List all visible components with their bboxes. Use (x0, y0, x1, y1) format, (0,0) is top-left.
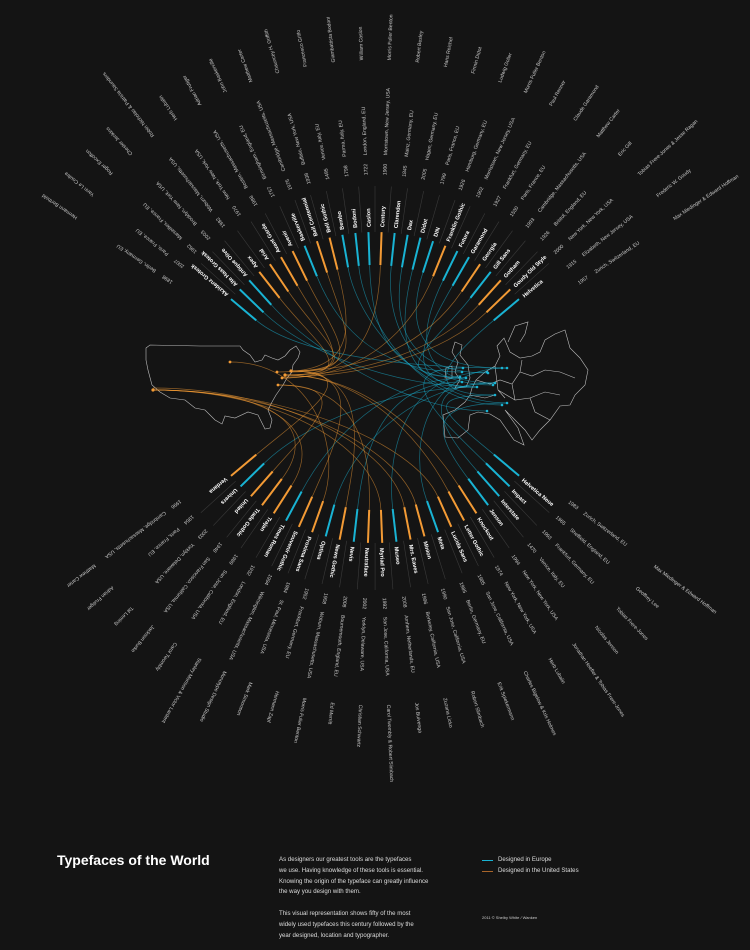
typeface: Arial: Robin Nicholas & Patricia Saunders (101, 70, 156, 138)
typeface: Minion: San Jose, California, USA (444, 606, 467, 665)
typeface: News Gothic: Woburn, Massachusetts, USA (305, 611, 325, 679)
typeface: Antique Olive: Roger Excoffon (85, 148, 114, 176)
typeface: Clarendon: 1845 (402, 165, 409, 177)
typeface: Arial: Woburn, Massachusetts, USA (168, 155, 215, 213)
typeface: Helvetica: Helvetica (522, 278, 545, 299)
typeface: Bell Gothic: Bell Gothic (320, 203, 333, 233)
connection curves (153, 265, 507, 510)
typeface: Impact: Impact (510, 489, 527, 506)
typeface: Myriad Pro: Myriad Pro (378, 548, 385, 578)
typeface: Trajan: Trajan (258, 515, 272, 533)
typeface: Avenir: 1988 (249, 194, 259, 207)
typeface: Clarendon: Robert Besley (415, 30, 425, 63)
typeface: Dax: Hagen, Germany, EU (425, 112, 440, 161)
typeface: Souvenir Gothic: Wilmington, Massachusetts, USA (227, 590, 265, 661)
typeface: Bell Gothic: Buffalo, New York, USA (287, 112, 307, 165)
typeface: Baskerville: Baskerville (290, 212, 307, 242)
typeface: Century: Morristown, New Jersey, USA (383, 87, 392, 155)
typeface: Avenir: Avenir (281, 228, 294, 247)
typeface: Souvenir Gothic: 1994 (263, 573, 273, 586)
typeface: Jenson: 1470 (525, 542, 537, 555)
typeface: Bembo: 1495 (323, 168, 331, 180)
typeface: Avenir: Boston, Massachusetts, USA (212, 128, 250, 189)
typeface: Optima: 1952 (301, 587, 310, 600)
legend: Designed in Europe (498, 856, 552, 863)
typeface: Neutraface: Neutraface (362, 548, 369, 577)
typeface: Goudy Old Style: 1915 (565, 259, 578, 271)
description text: widely used typefaces this century followed by the (279, 921, 414, 928)
typeface: Proxima Sans (235, 500, 332, 716)
typeface: Jenson: Venice, Italy, EU (537, 557, 566, 589)
typeface: Goudy Old Style (485, 168, 693, 318)
typeface: DIN: Ludwig Goller (497, 52, 514, 84)
description text: the way you design with them. (279, 888, 361, 895)
typeface: News Gothic (292, 506, 355, 743)
typeface: Letter Gothic: Herb Lubalin (547, 657, 566, 685)
typeface: Dax: Hans Reichel (443, 37, 455, 68)
typeface: Futura: 1927 (492, 195, 503, 208)
typeface: Gill Sans: Eric Gill (617, 141, 633, 158)
typeface: Caslon: Caslon (366, 208, 373, 227)
typeface: Proxima Sans: Mark Simonson (235, 681, 253, 716)
typeface: United: United (232, 497, 249, 514)
typeface: Lucida Sans: San Jose, California, USA (484, 591, 515, 647)
typeface: Lucida Sans: Lucida Sans (449, 531, 468, 563)
typeface: Georgia: 1993 (525, 217, 536, 230)
typeface: United: Yorklyn, Delaware, USA (153, 541, 195, 585)
typeface: Baskerville (208, 57, 325, 277)
typeface: Interstate (474, 465, 649, 642)
typeface: Univers (85, 460, 270, 611)
typeface: Futura (442, 79, 567, 284)
typeface: Impact: Sheffield, England, EU (568, 527, 611, 566)
typeface: Myriad Pro: 1992 (381, 598, 387, 609)
typeface: United (113, 468, 279, 627)
typeface: Baskerville: 1757 (266, 185, 277, 198)
typeface: Letter Gothic: Letter Gothic (463, 524, 484, 558)
typeface: Optima (265, 503, 343, 724)
typeface: Nevis: Ed Merritt (326, 702, 335, 725)
typeface: Nevis (326, 508, 366, 725)
typeface: Franklin Gothic: Morris Fuller Benton (523, 50, 548, 94)
typeface: Dax (400, 37, 455, 269)
typeface: Univers: Univers (219, 487, 238, 505)
typeface: Akzidenz Grotesk: Akzidenz Grotesk (190, 262, 230, 297)
typeface: Akzidenz Grotesk (41, 192, 262, 322)
description text: year designed, location and typographer. (279, 932, 389, 939)
typeface: Interstate: Frankfurt, Germany, EU (553, 543, 595, 586)
typeface: Interstate: 1993 (540, 529, 553, 541)
typeface: Gotham: Gotham (503, 260, 522, 280)
typeface: Helvetica Neue: 1983 (567, 500, 579, 511)
typeface: Garamond: Garamond (470, 227, 490, 255)
typeface: Apex: Brooklyn, New York, USA (155, 179, 199, 226)
typeface: Nevis: Bournemouth, England, EU (332, 615, 346, 677)
typeface: Univers: 1954 (182, 513, 195, 525)
typeface: United: Tal Leming (113, 605, 134, 627)
typeface: Franklin Gothic: Morristown, New Jersey, USA (483, 117, 517, 181)
typeface: Interstate: Tobias Frere-Jones (614, 606, 649, 642)
typeface: Interstate: Interstate (499, 499, 520, 522)
typeface: Garamond: 1530 (509, 205, 520, 218)
typeface: Helvetica Neue: Max Miedinger & Edward Hoffman (652, 564, 718, 616)
typeface: Bodoni: Bodoni (351, 208, 359, 228)
typeface: Bell Centennial: Bell Centennial (301, 196, 320, 237)
typeface: Lucida Sans (434, 493, 557, 737)
typeface: Georgia (460, 108, 622, 296)
typeface: Museo: Jos Buivenga (413, 702, 423, 733)
typeface: Bell Centennial: Cambridge, Massachusetts, USA (256, 99, 287, 172)
typeface: Arial: Arial (259, 247, 271, 261)
typeface: News Gothic: News Gothic (328, 544, 340, 578)
map: united states (146, 345, 300, 429)
typeface: Gotham: Tobias Frere-Jones & Jesse Ragan (637, 119, 699, 177)
typeface: Futura: Futura (458, 229, 472, 249)
typeface: Myriad Pro (376, 510, 394, 782)
typeface: Souvenir Gothic: Souvenir Gothic (275, 530, 298, 572)
typeface: Gotham: New York, New York, USA (567, 197, 615, 242)
typeface: Georgia: Matthew Carter (596, 108, 622, 139)
typeface: Caslon: London, England, EU (361, 106, 369, 155)
typeface: Meta (423, 498, 515, 721)
typeface: Clarendon (390, 30, 425, 267)
typeface: Apex: Apex (246, 254, 260, 269)
typeface: Franklin Gothic: Franklin Gothic (446, 202, 467, 243)
typeface: Antique Olive: Marseilles, France, EU (142, 201, 184, 241)
typeface: Knockout (455, 481, 626, 719)
typeface: Souvenir Gothic: Monotype Design Studio (198, 670, 227, 723)
typeface: Franklin Gothic (432, 50, 548, 279)
typeface: Lucida Sans: 1985 (476, 574, 486, 587)
typeface: Antique Olive: 1962 (186, 242, 199, 254)
typeface: Didot: Firmin Didot (470, 46, 484, 75)
typeface: Verdana (65, 451, 262, 588)
typeface: Meta: 1985 (458, 581, 467, 594)
typeface: Museo: Arnhem, Netherlands, EU (403, 615, 415, 674)
typeface: Alte Haas Grotesk: Alte Haas Grotesk (200, 249, 239, 287)
typeface: Trade Gothic: Trade Gothic (235, 507, 260, 537)
typeface: Clarendon: Mainz, Germany, EU (404, 110, 415, 157)
typeface: Antique Olive (85, 148, 277, 306)
description text: we use. Having knowledge of these tools is essential. (279, 867, 423, 874)
typeface: Alte Haas Grotesk: Yann Le Coultre (63, 170, 96, 197)
typeface: Bell Centennial: 1975 (285, 178, 294, 191)
typeface: Trajan (154, 483, 299, 672)
typeface: Jenson: Nicolas Jenson (593, 625, 620, 656)
typeface: Alte Haas Grotesk: 2007 (173, 257, 186, 269)
typeface: DIN: Hamburg, Germany, EU (465, 119, 489, 173)
typeface: Knockout: Jonathan Hoefler & Tobias Frere-Jones (570, 642, 626, 719)
typeface: Mrs. Eaves: Zuzana Licko (441, 697, 453, 728)
typeface: Helvetica Neue: Helvetica Neue (520, 478, 554, 508)
credit: 2011 © Shelby White / Wanken (482, 915, 537, 920)
typeface: Baskerville: John Baskerville (208, 57, 229, 94)
typeface: Optima: Optima (315, 540, 326, 561)
typeface: Neutraface: Christian Schwartz (355, 705, 363, 748)
typeface: Letter Gothic: New York, New York, USA (503, 581, 538, 636)
typeface: Times Roman: London, England, EU (217, 580, 246, 625)
typeface: Apex: 2003 (200, 228, 212, 241)
typeface: Mrs. Eaves (400, 506, 453, 728)
typeface: Myriad Pro: Carol Twombly & Robert Slimbach (385, 705, 394, 782)
typeface: Avant Garde (158, 94, 305, 287)
typeface: Century: Morris Fuller Benton (387, 14, 395, 60)
typeface: Helvetica: Max Miedinger & Edward Hoffman (672, 174, 740, 222)
typeface: Bell Gothic: 1938 (304, 172, 313, 185)
map: europe (443, 322, 588, 445)
typeface: Times Roman: Stanley Morison & Victor Lardent (160, 656, 202, 724)
typeface: Univers: Adrian Frutiger (85, 584, 115, 611)
typeface: Times Roman (160, 489, 309, 724)
typeface: Bodoni: 1798 (343, 165, 350, 177)
typeface: DIN: 1926 (458, 179, 467, 191)
typeface: Bell Centennial (237, 48, 335, 273)
typeface: Gotham: 2000 (553, 244, 565, 256)
typeface: Knockout: 1994 (510, 554, 521, 567)
typeface: Minion: Minion (421, 541, 432, 560)
typeface: Bodoni: Parma, Italy, EU (338, 120, 348, 157)
typeface: Letter Gothic: 1974 (493, 564, 504, 577)
typeface: Bell Centennial: Matthew Carter (237, 48, 254, 83)
typeface: Neutraface: 2002 (361, 598, 367, 609)
typeface: Mrs. Eaves: Berkeley, California, USA (424, 611, 441, 669)
typeface: Akzidenz Grotesk: Berlin, Germany, EU (116, 242, 158, 273)
typeface: United: 2003 (196, 528, 208, 540)
description text: Knowing the origin of the typeface can greatly influence (279, 878, 428, 885)
typeface: Mrs. Eaves: 1996 (420, 593, 428, 605)
typeface: Impact (483, 457, 660, 610)
typeface: Caslon (358, 26, 378, 265)
typeface: Lucida Sans: Charles Bigelow & Kris Holmes (522, 670, 557, 737)
typeface: Avant Garde: 1970 (231, 204, 243, 217)
typeface: Didot (411, 46, 484, 272)
typeface: Avenir (182, 74, 314, 281)
top arc: typefaces A-H (41, 14, 740, 324)
typeface: Trajan: San Jose, California, USA (189, 568, 228, 621)
typeface: Bembo (296, 29, 356, 268)
typeface: Didot: Didot (420, 218, 430, 234)
typeface: Didot: 1799 (439, 173, 448, 185)
typeface: Proxima Sans: Proxima Sans (294, 535, 312, 572)
typeface: Minion (411, 502, 485, 729)
typeface: Helvetica (493, 174, 740, 324)
typeface: Futura: Paul Renner (548, 79, 567, 107)
typeface: Alte Haas Grotesk (63, 170, 269, 313)
typeface: Goudy Old Style: Goudy Old Style (513, 255, 548, 289)
typeface: DIN: DIN (433, 227, 442, 238)
typeface: Bembo: Venice, Italy, EU (314, 123, 327, 160)
typeface: Gill Sans: 1926 (539, 230, 552, 242)
typeface: Meta: Berlin, Germany, EU (464, 599, 486, 645)
typeface: Avant Garde: Avant Garde (261, 222, 282, 254)
typeface: Antique Olive: Antique Olive (221, 247, 249, 278)
typeface: Optima: Hermann Zapf (265, 690, 280, 724)
typeface: Garamond (451, 84, 601, 290)
typeface: Century: Century (380, 205, 387, 227)
typeface: Museo (388, 508, 423, 733)
typeface: Akzidenz Grotesk: Hermann Berthold (41, 192, 79, 220)
typeface: Georgia: Cambridge, Massachusetts, USA (537, 151, 588, 214)
typeface: Museo: Museo (393, 547, 401, 565)
typeface: Bodoni (326, 16, 367, 266)
description text: As designers our greatest tools are the typefaces (279, 856, 411, 863)
typeface: Knockout: Knockout (475, 517, 494, 542)
typeface: Times Roman: 1932 (245, 564, 256, 577)
typeface: Proxima Sans: 1994 (281, 581, 291, 594)
typeface: Meta: Erik Spiekermann (496, 681, 515, 721)
typeface: Arial: 1982 (215, 216, 227, 228)
typeface: Verdana: Cambridge, Massachusetts, USA (103, 509, 167, 560)
typeface: Jenson: Jenson (488, 508, 504, 528)
typeface: Univers: Paris, France, EU (146, 526, 180, 557)
typeface: Impact: 1965 (554, 515, 567, 527)
typeface: Trade Gothic: Jackson Burke (129, 624, 155, 654)
typeface: DIN (421, 52, 514, 275)
typeface: Jenson (465, 473, 620, 656)
typeface: Alte Haas Grotesk: Paris, France, EU (135, 227, 170, 257)
bottom arc: typefaces H-V (65, 451, 718, 782)
typeface: Helvetica Neue (491, 453, 718, 616)
typeface: Apex (105, 125, 286, 299)
typeface: Trade Gothic (129, 476, 289, 654)
typeface: Optima: Frankfurt, Germany, EU (284, 606, 304, 659)
typeface: News Gothic: Morris Fuller Benton (292, 697, 307, 743)
typeface: Futura: Frankfurt, Germany, EU (502, 140, 534, 190)
typeface: Century (379, 14, 395, 265)
location dots (151, 361, 508, 412)
typeface: Mrs. Eaves: Mrs. Eaves (407, 544, 418, 574)
typeface: Goudy Old Style: Frederic W. Goudy (655, 168, 693, 199)
typeface: Trajan: 1989 (227, 553, 239, 566)
typeface: Bell Gothic: Chauncey H. Griffith (263, 28, 281, 74)
typeface: Trade Gothic: San Francisco, California, USA (162, 556, 211, 614)
typeface: Minion: Robert Slimbach (469, 691, 485, 729)
typeface: Bell Gothic (263, 28, 345, 270)
typeface: Didot: Paris, France, EU (445, 125, 462, 166)
title: Typefaces of the World (57, 852, 210, 868)
typeface: Meta: Meta (436, 536, 446, 551)
typeface: Bodoni: Giambattista Bodoni (326, 16, 337, 63)
typeface: Goudy Old Style: Elizabeth, New Jersey, USA (581, 214, 635, 258)
typeface: Nevis: 2008 (340, 596, 348, 608)
description text: This visual representation shows fifty of the most (279, 910, 410, 917)
typeface: Nevis: Nevis (347, 546, 355, 562)
typeface: Dax: 2005 (421, 168, 429, 180)
typeface: Gill Sans: Bristol, England, EU (553, 190, 588, 228)
typeface: Dax: Dax (407, 219, 415, 231)
typeface: Helvetica: Zurich, Switzerland, EU (594, 240, 641, 275)
typeface: Bembo: Francesco Griffo (296, 29, 309, 67)
typeface: Century: 1900 (382, 164, 389, 175)
typeface: Avant Garde: Herb Lubalin (158, 94, 179, 121)
typeface: Verdana: 1996 (169, 498, 182, 510)
typeface: Verdana: Matthew Carter (65, 562, 97, 588)
typeface: Georgia: Georgia (482, 241, 499, 263)
typeface: Impact: Geoffrey Lee (634, 586, 660, 610)
typeface: Trajan: Carol Twombly (154, 641, 178, 672)
typeface: Knockout: New York, New York, USA (520, 570, 559, 622)
typeface: Helvetica Neue: Zurich, Switzerland, EU (582, 511, 628, 548)
typeface: Neutraface: Yorklyn, Delaware, USA (358, 617, 366, 672)
typeface: Gill Sans (469, 141, 633, 303)
typeface: Franklin Gothic: 1902 (475, 186, 485, 199)
typeface: Apex: Chester Jenkins (105, 125, 134, 156)
typeface: Letter Gothic (445, 487, 566, 685)
typeface: Avant Garde: New York, New York, USA (194, 147, 232, 200)
typeface: Minion: 1990 (439, 588, 448, 601)
typeface: Proxima Sans: St. Paul, Minnesota, USA (258, 599, 284, 655)
typeface: Myriad Pro: San Jose, California, USA (382, 617, 390, 676)
typeface: Avenir: Adrian Frutiger (182, 74, 203, 106)
typeface: Caslon: William Caslon (358, 26, 365, 60)
typeface: Helvetica: 1957 (577, 275, 590, 286)
typeface: Arial (101, 70, 295, 292)
typeface: Bembo: Bembo (337, 210, 346, 230)
typeface: Baskerville: Birmingham, England, EU (238, 124, 268, 180)
typeface: Garamond: Claude Garamond (573, 84, 601, 122)
description text (279, 856, 428, 939)
typeface: Neutraface (355, 510, 378, 748)
typeface: Caslon: 1722 (363, 164, 370, 175)
typeface: Akzidenz Grotesk: 1898 (161, 273, 174, 285)
legend: Designed in the United States (498, 867, 579, 874)
typeface: Souvenir Gothic (198, 495, 320, 723)
typeface: News Gothic: 1908 (320, 592, 329, 605)
typeface: Trade Gothic: 1948 (211, 541, 223, 553)
legend (482, 856, 579, 920)
typeface: Garamond: Paris, France, EU (520, 164, 547, 201)
typeface: Museo: 2008 (400, 596, 408, 608)
typeface: Gill Sans: Gill Sans (493, 248, 512, 271)
typeface: Verdana: Verdana (207, 476, 228, 495)
typeface: Gotham (478, 119, 699, 310)
typeface: Clarendon: Clarendon (394, 200, 403, 229)
typeface: Times Roman: Times Roman (262, 523, 285, 558)
